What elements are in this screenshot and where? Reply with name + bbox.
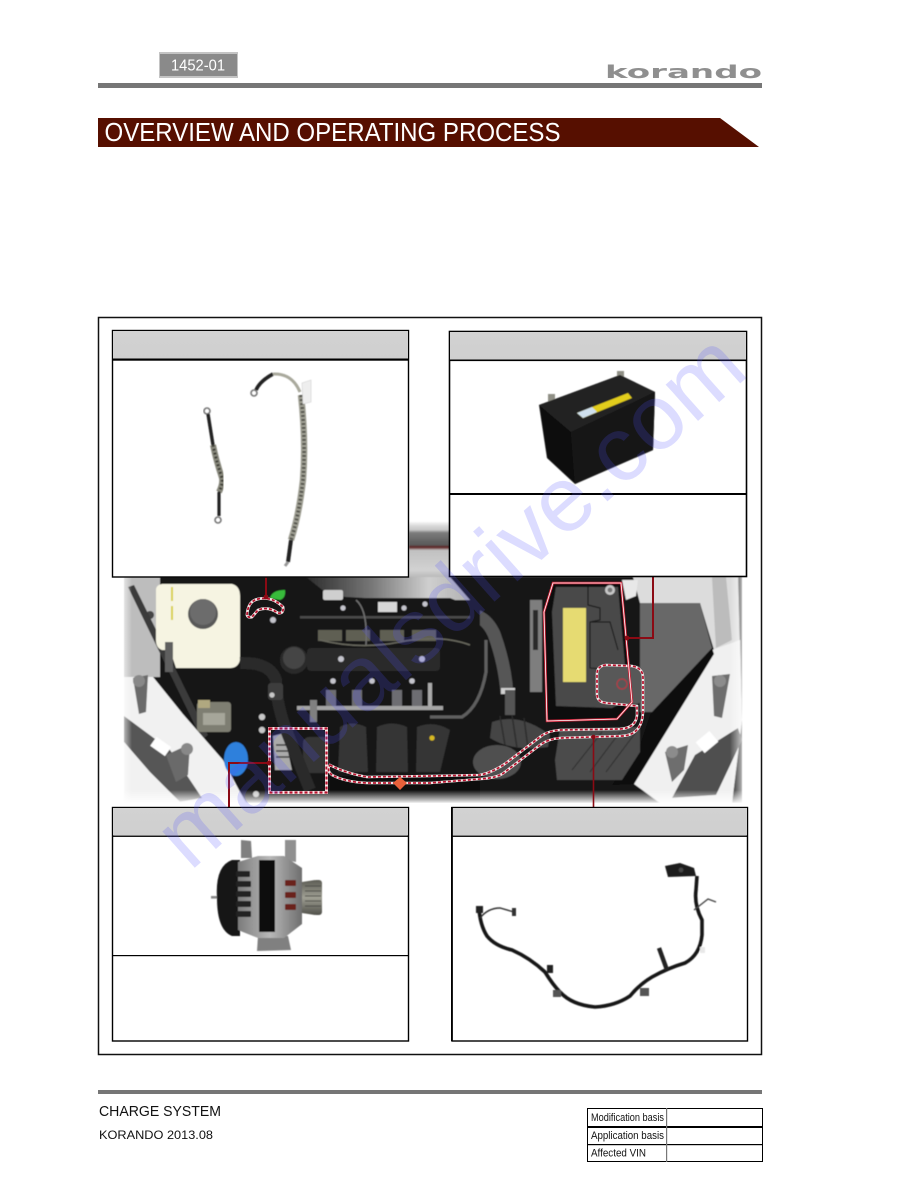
revision table — [587, 1108, 763, 1162]
callout line: alternator — [229, 761, 271, 808]
coil bolts — [270, 601, 428, 684]
panel header — [450, 332, 746, 360]
panel header — [113, 331, 408, 359]
alternator in photo — [273, 733, 292, 770]
washer cap — [224, 742, 248, 776]
battery harness outline: dashed route — [328, 665, 643, 783]
revision table: Modification basis — [591, 1112, 664, 1124]
master cylinder — [197, 700, 231, 732]
left strut tower area — [124, 577, 182, 720]
main black hose — [240, 663, 310, 790]
header rule — [98, 83, 762, 88]
alternator image — [211, 840, 322, 951]
bay right side: white fender — [634, 640, 742, 803]
left brackets — [133, 675, 193, 782]
battery image — [539, 371, 655, 484]
callout line: battery — [625, 575, 653, 640]
long ground cable — [251, 374, 311, 566]
outer frame — [98, 318, 762, 1054]
left white fender — [124, 677, 246, 803]
footer rule — [98, 1090, 762, 1094]
footer section name: CHARGE SYSTEM — [99, 1104, 221, 1120]
engine bay photo — [118, 518, 748, 810]
battery highlight: solid outline — [544, 583, 632, 721]
bay right side: top light panel — [633, 577, 740, 660]
callout line: ground cable — [264, 575, 268, 599]
panel header — [113, 808, 408, 835]
air intake hose and resonator — [473, 745, 521, 779]
alternator highlight: dashed box — [270, 728, 326, 792]
section tab: 1452-01 — [159, 52, 238, 78]
watermark: manualsdrive.com — [136, 313, 764, 887]
right dark band — [672, 728, 742, 798]
fuel rail and injectors — [297, 683, 443, 722]
panel: ground cables — [112, 330, 409, 577]
brand logo: korando: korando — [605, 62, 762, 83]
panel header — [453, 808, 747, 835]
right grey box — [640, 603, 712, 712]
short ground cable — [204, 408, 222, 523]
wiring loop — [430, 640, 486, 717]
title banner: OVERVIEW AND OPERATING PROCESS — [104, 117, 560, 147]
wiring harness image — [476, 863, 716, 1007]
photo edge fade — [118, 518, 748, 810]
left dark band — [124, 716, 202, 802]
harness clip marker — [393, 777, 407, 790]
callout line: harness — [591, 735, 596, 808]
bracket near battery — [530, 600, 542, 692]
photo background: dark engine bay — [124, 577, 742, 803]
panel: battery harness — [451, 807, 748, 1041]
valve cover — [270, 590, 480, 690]
revision table: Affected VIN — [591, 1148, 646, 1160]
panel: alternator — [112, 808, 409, 1041]
revision table: Application basis — [591, 1130, 664, 1142]
green cap — [270, 590, 285, 600]
dark gap along the fender — [612, 648, 714, 785]
footer model and date: KORANDO 2013.08 — [99, 1128, 213, 1142]
small bolts — [253, 692, 275, 797]
hood area between panels — [409, 522, 450, 582]
harness outline: small arch — [247, 598, 283, 617]
intake runners — [303, 724, 450, 773]
oil filler cap — [280, 646, 308, 674]
right hose — [463, 615, 507, 694]
silver engine cover — [306, 577, 470, 600]
panel: battery — [449, 332, 747, 576]
lower air box — [555, 727, 640, 780]
section tab: 1452-01: 1452-01 — [171, 58, 225, 74]
battery in photo — [544, 580, 642, 720]
coolant reservoir — [156, 584, 240, 668]
